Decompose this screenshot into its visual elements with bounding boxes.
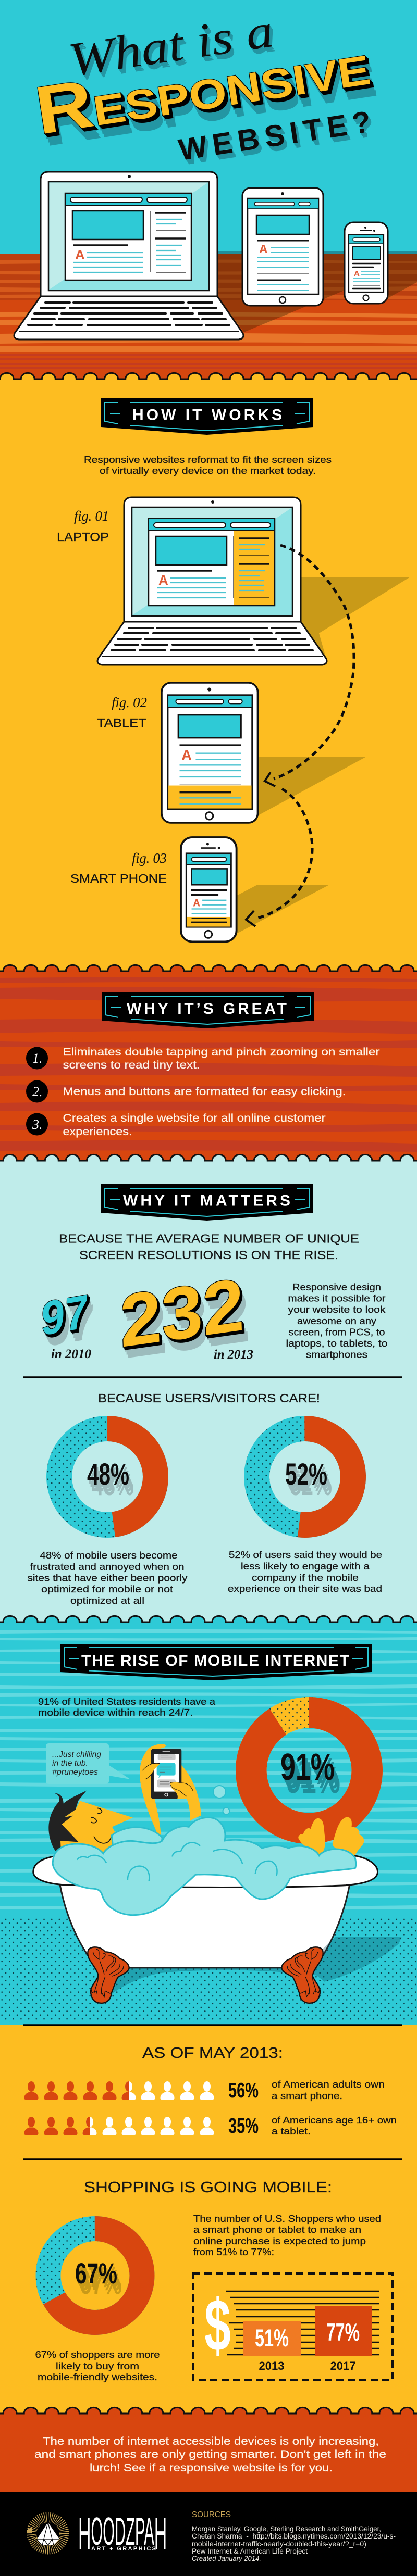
figure label: tablet: fig. 02 (112, 695, 147, 710)
stat text: 91 percent: mobile device within reach 24/7. (38, 1707, 193, 1718)
logo: hoodzpah wordmark: H (78, 2508, 91, 2559)
bathtub (33, 1856, 377, 1968)
figure label: tablet: TABLET (97, 716, 146, 730)
banner heading: why it matters (101, 1184, 313, 1221)
heading: as of may 2013: AS OF MAY 2013: (142, 2045, 283, 2062)
figure: laptop (97, 497, 327, 665)
toes (298, 1817, 364, 1857)
banner heading: why it's great: WHY IT’S GREAT (127, 1000, 287, 1017)
stat: 97 in 2010: 97 (40, 1285, 89, 1346)
bubbles (213, 1786, 229, 1814)
stat: 35% (228, 2114, 397, 2138)
logo: hoodzpah wordmark (78, 2508, 167, 2559)
caption: 52%: company if the mobile (252, 1573, 359, 1583)
caption: 48%: 48% of mobile users become (40, 1550, 177, 1561)
hero phone: A (354, 269, 360, 278)
caption: 52%: less likely to engage with a (241, 1561, 370, 1572)
responsive design text: makes it possible for (288, 1293, 386, 1304)
figure label: smart phone (70, 850, 167, 885)
figure label: smart phone: fig. 03 (132, 850, 167, 866)
panel: rise of mobile internet (0, 1616, 417, 2025)
hero laptop (14, 172, 243, 340)
stat: 56% (228, 2078, 385, 2102)
conclusion text: and smart phones are only getting smarter. Don't get left in the (34, 2448, 386, 2460)
text: shoppers jump: The number of U.S. Shoppers who used (193, 2214, 381, 2224)
hero laptop: A (75, 247, 85, 262)
conclusion text: The number of internet accessible devices is only increasing, (43, 2435, 379, 2447)
speech bubble: in the tub. (52, 1759, 88, 1768)
caption: 48% (27, 1550, 188, 1606)
responsive design text: laptops, to tablets, to (286, 1338, 388, 1349)
figure label: laptop: LAPTOP (57, 530, 109, 544)
donut chart: 48%: 48% (87, 1457, 129, 1491)
hero tablet: A (259, 242, 268, 256)
logo: hoodzpah wordmark: ART + GRAPHICS (91, 2546, 156, 2552)
logo: hoodzpah wordmark: OODZPA (91, 2510, 154, 2554)
panel: why it matters (0, 1154, 417, 1623)
logo: hoodzpah emblem (32, 2518, 64, 2549)
responsive design text: screen, from PCS, to (289, 1327, 385, 1337)
hero tablet (242, 188, 323, 306)
intro text (84, 454, 332, 476)
donut chart: 52% (256, 1429, 353, 1525)
caption: 67%: mobile-friendly websites. (38, 2372, 157, 2382)
caption: 52%: experience on their site was bad (228, 1584, 382, 1594)
device shadows (237, 577, 410, 934)
banner heading: how it works (101, 398, 313, 435)
conclusion text: lurch! See if a responsive website is for you. (90, 2461, 333, 2474)
responsive design text: Responsive design (292, 1282, 381, 1292)
stat: 35%: a tablet. (272, 2126, 311, 2137)
caption: 48%: sites that have either been poorly (27, 1573, 188, 1583)
bar chart: purchases: 51% (255, 2324, 289, 2352)
pictogram row: 35% (24, 2117, 214, 2135)
subheading: resolutions (59, 1232, 359, 1262)
stat text: 91 percent (38, 1696, 216, 1718)
list item 3: Creates a single website for all online customer (63, 1112, 326, 1124)
arms (140, 1744, 166, 1842)
panel: hero (0, 0, 417, 379)
logo: hoodzpah wordmark: H (154, 2508, 167, 2559)
caption: 67%: likely to buy from (56, 2361, 139, 2371)
stat: 35%: of Americans age 16+ own (272, 2115, 397, 2126)
wood table (0, 254, 417, 379)
banner heading: why it matters: WHY IT MATTERS (123, 1192, 290, 1209)
donut chart: 67%: 67% (75, 2257, 117, 2290)
responsive design text: smartphones (306, 1350, 367, 1360)
hands (142, 1763, 160, 1779)
bar chart: purchases: 77% (326, 2318, 360, 2346)
arrow: tablet to phone (246, 789, 312, 926)
panel: footer (0, 2492, 417, 2576)
list item 2: 2. (32, 1084, 43, 1099)
heading: shopping is going mobile: SHOPPING IS GOING MOBILE: (84, 2179, 332, 2196)
text: shoppers jump: from 51% to 77%: (193, 2247, 274, 2257)
text: shoppers jump: a smart phone or tablet to make an (193, 2225, 361, 2235)
hero phone (345, 222, 388, 304)
responsive design text (286, 1282, 388, 1360)
figure: laptop: A (158, 572, 168, 588)
soap foam (53, 1817, 364, 1915)
stat: 97 in 2010: in 2010 (51, 1347, 92, 1361)
figure: tablet (162, 683, 257, 823)
donut chart: 67% (48, 2229, 142, 2322)
caption: 67%: 67% of shoppers are more (35, 2349, 160, 2360)
list item 1: Eliminates double tapping and pinch zooming on smaller (63, 1046, 379, 1058)
speech bubble: #pruneytoes (52, 1768, 98, 1777)
speech bubble: ...Just chilling (52, 1750, 101, 1759)
hair (48, 1791, 87, 1851)
caption: 52%: 52% of users said they would be (229, 1550, 382, 1560)
text: shoppers jump (193, 2214, 381, 2257)
stat: 232 in 2013: in 2013 (214, 1348, 253, 1362)
figure: phone: A (193, 898, 200, 909)
banner heading: rise of mobile internet: THE RISE OF MOBILE INTERNET (81, 1652, 349, 1669)
list item 1: 1. (32, 1051, 43, 1066)
responsive design text: your website to look (288, 1304, 386, 1315)
sources (192, 2510, 396, 2562)
caption: 48%: optimized for mobile or not (41, 1584, 173, 1594)
figure label: tablet (97, 695, 147, 730)
subheading: resolutions: BECAUSE THE AVERAGE NUMBER OF UNIQUE (59, 1232, 359, 1246)
table shadow (217, 254, 417, 332)
bathing person (48, 1744, 201, 1854)
conclusion text (34, 2435, 386, 2474)
face (60, 1801, 133, 1854)
list item 2 (26, 1080, 346, 1103)
sources: Pew Internet & American Life Project (192, 2547, 308, 2555)
donut chart: 91% (251, 1713, 367, 1828)
banner heading: how it works: HOW IT WORKS (132, 406, 282, 424)
figure: phone (181, 837, 237, 941)
caption: 48%: optimized at all (70, 1595, 144, 1606)
banner heading: why it's great (102, 992, 314, 1028)
panel: how it works (0, 373, 417, 972)
list item 3: experiences. (63, 1126, 132, 1138)
title: What is a: What is a (65, 4, 277, 86)
tub feet (88, 1947, 323, 2003)
stat: 56%: of American adults own (272, 2079, 385, 2090)
panel: mobile stats (23, 2024, 402, 2383)
bar chart: purchases: 2017 (330, 2359, 355, 2372)
stat text: 91 percent: 91% of United States residents have a (38, 1696, 216, 1707)
responsive design text: awesome on any (297, 1316, 376, 1326)
bar chart: purchases (193, 2273, 393, 2380)
caption: 52% (228, 1550, 382, 1594)
banner heading: rise of mobile internet (60, 1644, 372, 1680)
subheading: resolutions: SCREEN RESOLUTIONS IS ON THE RISE. (79, 1248, 338, 1262)
tub shadow (106, 1937, 401, 1999)
handheld phone (151, 1749, 181, 1799)
title: Website?: WEBSITE? (176, 105, 373, 167)
bar chart: purchases: $ (204, 2284, 231, 2366)
list item 3: 3. (32, 1117, 43, 1132)
text: shoppers jump: online purchase is expected to jump (193, 2236, 366, 2246)
bar chart: purchases: 2013 (259, 2359, 284, 2372)
donut chart: 91%: 91% (280, 1746, 335, 1788)
sources: Chetan Sharma - http://bits.blogs.nytimes.com/2013/12/23/u-s- (192, 2532, 396, 2540)
list item 3 (26, 1112, 326, 1138)
intro text: of virtually every device on the market today. (100, 465, 316, 476)
caption: 67% (35, 2349, 160, 2382)
sources: mobile-internet-traffic-nearly-doubled-this-year/?_r=0) (192, 2540, 366, 2548)
panel: conclusion (0, 2407, 417, 2492)
list item 2: Menus and buttons are formatted for easy clicking. (63, 1086, 346, 1098)
sources: SOURCES (192, 2510, 231, 2519)
floor (0, 1918, 417, 2025)
figure label: laptop: fig. 01 (74, 508, 109, 524)
sources: Morgan Stanley, Google, Sterling Research and SmithGeiger, (192, 2525, 381, 2533)
list item 1 (26, 1046, 379, 1071)
stat: 35%: 35% (228, 2114, 259, 2138)
subheading: users care: BECAUSE USERS/VISITORS CARE! (98, 1391, 320, 1405)
stat: 56%: 56% (228, 2078, 259, 2102)
caption: 48%: frustrated and annoyed when on (30, 1562, 185, 1572)
figure label: laptop (57, 508, 109, 544)
figure label: smart phone: SMART PHONE (70, 872, 167, 885)
speech bubble (46, 1743, 130, 1784)
panel: why it's great (0, 965, 417, 1161)
list item 1: screens to read tiny text. (63, 1059, 200, 1071)
sources: Created January 2014. (192, 2555, 261, 2562)
donut chart: 52%: 52% (285, 1457, 327, 1491)
title: Responsive: RESPONSIVE (30, 23, 374, 149)
pictogram row: 56% (24, 2081, 214, 2100)
intro text: Responsive websites reformat to fit the screen sizes (84, 454, 332, 465)
figure: tablet: A (181, 747, 192, 763)
donut chart: 48% (59, 1429, 155, 1525)
arrow: laptop to tablet (265, 545, 354, 786)
stat: 232 in 2013: 232 (119, 1263, 246, 1363)
stat: 56%: a smart phone. (272, 2090, 342, 2101)
